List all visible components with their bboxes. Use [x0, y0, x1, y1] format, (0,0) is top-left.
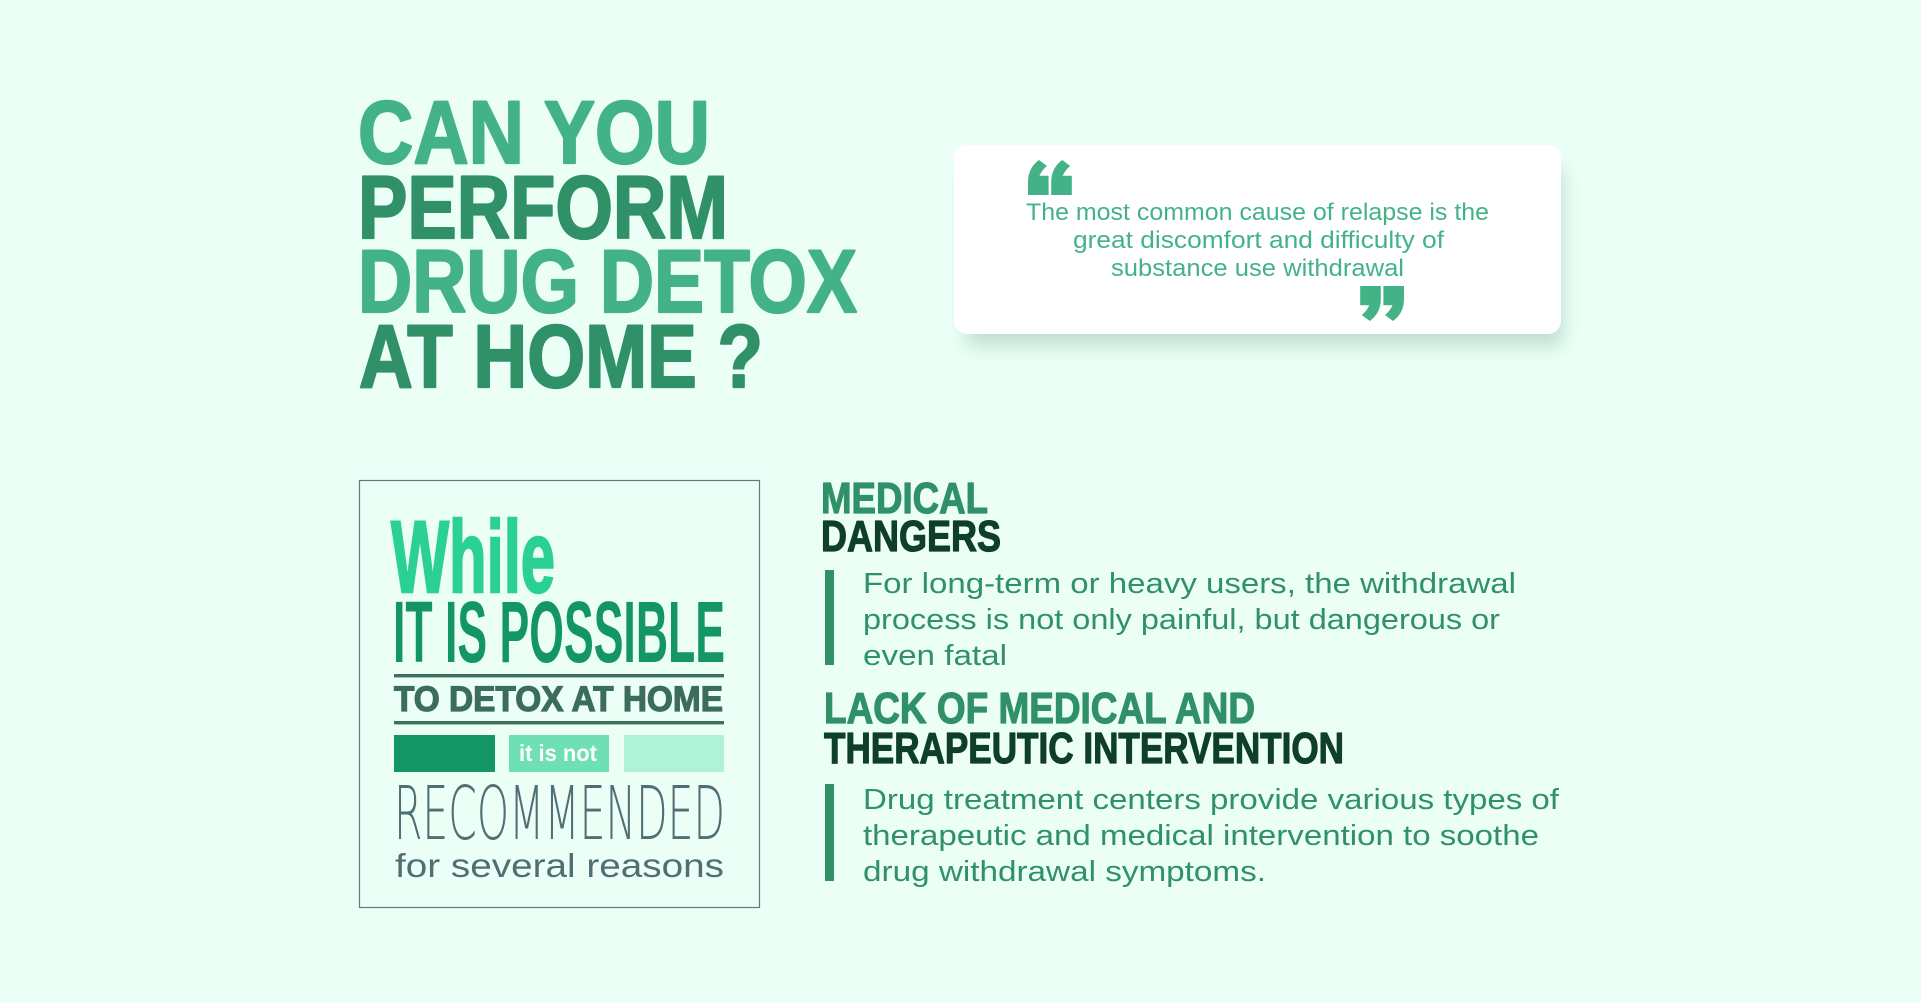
body text — [863, 784, 1560, 888]
quote card background — [954, 145, 1561, 334]
body text: process is not only painful, but dangerous or — [863, 604, 1500, 636]
panel: while it is possible — [360, 480, 760, 908]
heading: While: While — [391, 500, 555, 614]
section: medical dangers — [821, 474, 1516, 672]
title: PERFORM — [358, 157, 728, 257]
heading: lack of intervention — [824, 684, 1344, 773]
body text: therapeutic and medical intervention to soothe — [863, 820, 1539, 852]
body text: For long-term or heavy users, the withdrawal — [863, 568, 1516, 600]
body text: drug withdrawal symptoms. — [863, 856, 1266, 888]
quote panel — [1026, 160, 1489, 321]
heading: medical dangers — [821, 474, 1001, 561]
heading: lack of intervention: LACK OF MEDICAL AND — [824, 684, 1255, 733]
accent bar — [825, 784, 834, 881]
icon: opening quotation mark — [1028, 160, 1072, 195]
text: recommended: RECOMMENDED — [394, 771, 725, 857]
icon: closing quotation mark — [1360, 286, 1404, 321]
accent bar — [825, 570, 834, 665]
quote text — [1026, 199, 1489, 282]
text: for several reasons: for several reasons — [395, 847, 724, 884]
heading: it is possible: IT IS POSSIBLE — [393, 584, 725, 681]
heading: medical dangers: MEDICAL — [821, 474, 988, 523]
body text: even fatal — [863, 640, 1007, 672]
quote text: substance use withdrawal — [1111, 255, 1404, 282]
banner: to detox at home: TO DETOX AT HOME — [394, 680, 723, 719]
title: AT HOME ? — [359, 306, 763, 406]
title: CAN YOU — [358, 82, 710, 182]
title — [358, 82, 857, 406]
quote text: great discomfort and difficulty of — [1073, 227, 1444, 254]
body text: Drug treatment centers provide various types of — [863, 784, 1560, 816]
heading: lack of intervention: THERAPEUTIC INTERVENTION — [824, 724, 1344, 773]
colour blocks: it is not: it is not — [519, 740, 597, 766]
quote text: The most common cause of relapse is the — [1026, 199, 1489, 226]
title: DRUG DETOX — [358, 231, 857, 331]
colour blocks: it is not — [394, 735, 724, 772]
heading: medical dangers: DANGERS — [821, 512, 1001, 561]
body text — [863, 568, 1516, 672]
panel border — [360, 480, 760, 908]
section: lack of medical and therapeutic intervention — [824, 684, 1560, 888]
